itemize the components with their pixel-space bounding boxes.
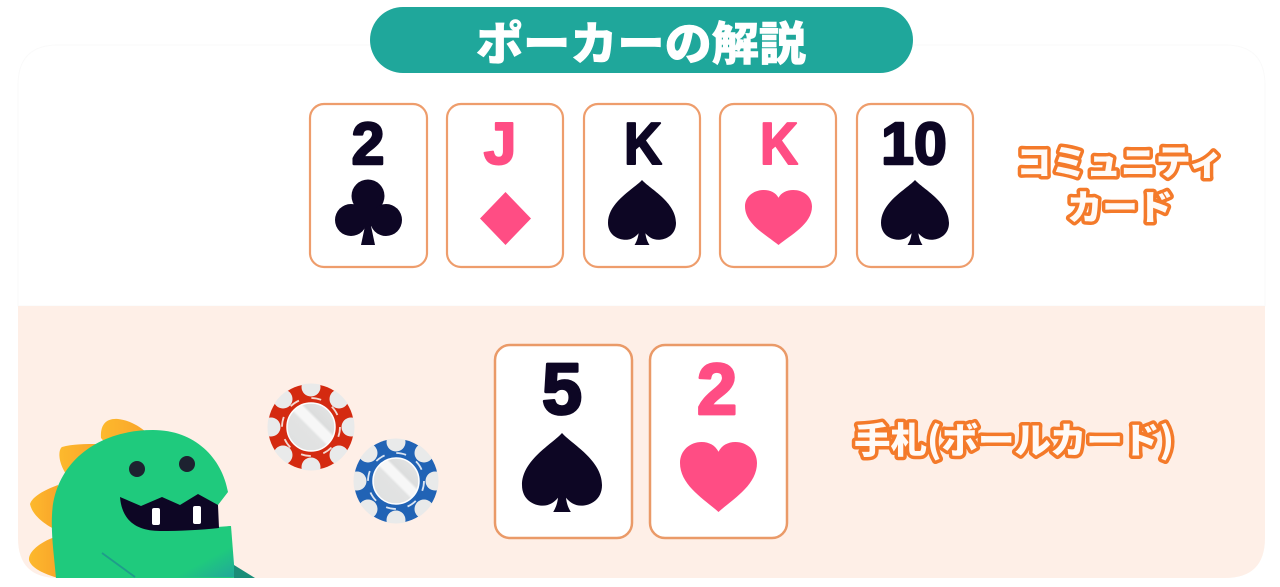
panel: community cards (white top section) xyxy=(18,45,1265,306)
card: J of diamonds: J xyxy=(484,111,516,177)
card: K of hearts xyxy=(720,104,836,267)
icon: blue poker chip xyxy=(354,438,438,524)
card: 2 of hearts xyxy=(650,345,787,538)
card: 2 of hearts: 2 xyxy=(697,350,737,430)
card: K of spades: K xyxy=(624,111,662,177)
card: 2 of clubs: 2 xyxy=(352,111,384,177)
label: community cards: コミュニティ xyxy=(1016,135,1224,186)
label: hole cards: 手札(ボールカード) xyxy=(854,412,1174,464)
character: green dinosaur mascot xyxy=(29,419,255,578)
card: 5 of spades xyxy=(495,345,632,538)
title pill: ポーカーの解説 xyxy=(476,8,806,74)
card: K of spades xyxy=(584,104,700,267)
card: 10 of spades: 10 xyxy=(881,111,947,177)
card: K of hearts: K xyxy=(760,111,798,177)
title pill xyxy=(370,7,913,74)
label: community cards: カード xyxy=(1067,180,1173,231)
panel: hole cards (peach bottom section) xyxy=(18,306,1265,578)
card: 5 of spades: 5 xyxy=(542,350,582,430)
card: 10 of spades xyxy=(857,104,973,267)
icon: red poker chip xyxy=(268,384,354,470)
card: J of diamonds xyxy=(447,104,563,267)
label: community cards xyxy=(1016,135,1224,231)
card: 2 of clubs xyxy=(310,104,427,267)
